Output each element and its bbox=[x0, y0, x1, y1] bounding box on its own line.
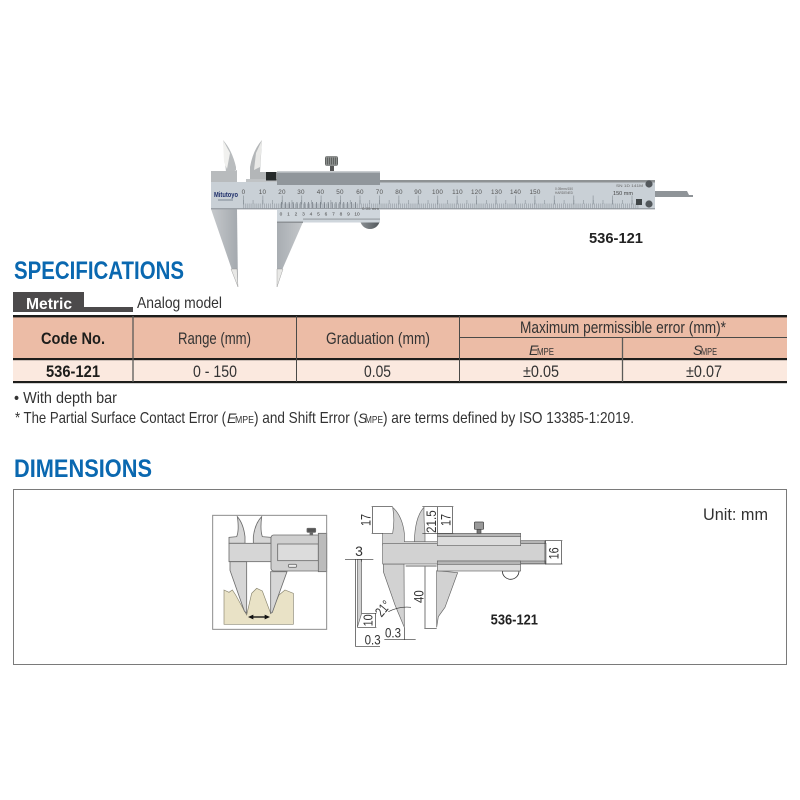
main scale numbers: 150 bbox=[529, 189, 541, 196]
header: code no: Code No. bbox=[41, 329, 105, 348]
note: error definitions bbox=[15, 410, 634, 427]
header: empe bbox=[529, 342, 554, 358]
header: maximum permissible error: Maximum permissible error (mm)* bbox=[520, 319, 726, 337]
slider: 4 bbox=[310, 212, 313, 218]
upper fixed jaw bbox=[211, 140, 237, 182]
thumb screw bbox=[325, 156, 338, 171]
thumb roller bbox=[360, 219, 380, 229]
caliper outline bbox=[357, 507, 546, 627]
dimension values bbox=[355, 510, 561, 647]
dimension values: 3 bbox=[355, 543, 363, 559]
dimension values: 17 bbox=[357, 514, 373, 526]
main scale numbers: 30 bbox=[297, 189, 305, 196]
main scale numbers: 10 bbox=[259, 189, 266, 196]
note: error definitions: E bbox=[227, 410, 237, 426]
heading: specifications: SPECIFICATIONS bbox=[14, 257, 184, 285]
main scale numbers: 0 bbox=[242, 189, 246, 196]
slider: 2 bbox=[295, 212, 298, 218]
tab: metric: Metric bbox=[26, 296, 72, 313]
slider: 0.05 mm bbox=[362, 207, 379, 211]
main scale numbers: 20 bbox=[278, 189, 286, 196]
dimension values: 21.5 bbox=[423, 510, 439, 533]
note: error definitions: ) are terms defined by ISO 13385-1:2019. bbox=[383, 410, 634, 427]
text: unit: Unit: mm bbox=[703, 505, 768, 524]
caliper jaws bbox=[229, 517, 327, 613]
beam end markings: HARDENED bbox=[555, 191, 573, 195]
main scale ticks bbox=[243, 200, 639, 206]
dimension values: 10 bbox=[361, 614, 375, 626]
slider: 5 bbox=[317, 212, 320, 218]
figure frame bbox=[213, 515, 327, 629]
header: smpe: S bbox=[693, 342, 703, 358]
measuring arrow bbox=[248, 615, 270, 619]
note: error definitions: * The Partial Surface Contact Error ( bbox=[15, 410, 227, 427]
specifications table bbox=[13, 315, 787, 383]
slider: 7 bbox=[332, 212, 335, 218]
header: smpe: MPE bbox=[701, 347, 717, 358]
cell: range: 0 - 150 bbox=[193, 363, 237, 381]
beam end markings: SN 1D 141M bbox=[616, 183, 643, 188]
header: empe: MPE bbox=[537, 347, 554, 358]
main scale numbers: 80 bbox=[395, 189, 403, 196]
main scale numbers: 70 bbox=[376, 189, 383, 196]
panel: dimensions frame bbox=[14, 490, 786, 664]
header: smpe bbox=[693, 342, 717, 358]
note: error definitions: MPE bbox=[235, 415, 254, 426]
header: graduation: Graduation (mm) bbox=[326, 330, 430, 348]
note: error definitions: ) and Shift Error ( bbox=[254, 410, 359, 427]
note: error definitions: MPE bbox=[365, 415, 383, 426]
slider: 3 bbox=[302, 212, 305, 218]
drawing model number: 536-121 bbox=[491, 611, 538, 628]
figure: measuring groove with caliper bbox=[213, 515, 327, 629]
dimension lines bbox=[345, 507, 562, 647]
slider: 0 bbox=[280, 212, 283, 218]
depth bar bbox=[655, 191, 693, 197]
main scale numbers: 100 bbox=[432, 189, 443, 196]
note: depth bar: • With depth bar bbox=[14, 390, 118, 407]
main scale numbers: 40 bbox=[317, 189, 324, 196]
main scale numbers: 60 bbox=[356, 189, 364, 196]
brand logo: Mitutoyo bbox=[214, 190, 238, 199]
cell: graduation: 0.05 bbox=[364, 363, 391, 381]
dimension values: 0.3 bbox=[385, 625, 401, 641]
beam end markings: 150 mm bbox=[613, 191, 633, 197]
slider: 6 bbox=[325, 212, 328, 218]
main scale numbers: 110 bbox=[452, 189, 463, 196]
product photo: vernier caliper bbox=[211, 140, 693, 287]
main scale numbers bbox=[242, 189, 541, 196]
main scale numbers: 140 bbox=[510, 189, 521, 196]
main scale numbers: 130 bbox=[491, 189, 502, 196]
cell: empe value: ±0.05 bbox=[523, 363, 559, 381]
dimension values: 21° bbox=[372, 597, 394, 620]
upper moving jaw bbox=[246, 140, 278, 182]
slider: 8 bbox=[340, 212, 343, 218]
main beam bbox=[211, 182, 655, 209]
slider: 9 bbox=[347, 212, 350, 218]
slider bbox=[266, 171, 380, 223]
header: range: Range (mm) bbox=[178, 330, 251, 348]
dimension values: 17 bbox=[437, 514, 453, 526]
slider: 10 bbox=[354, 212, 360, 218]
slider: 1 bbox=[287, 212, 290, 218]
model number label: 536-121 bbox=[589, 230, 643, 247]
heading: dimensions: DIMENSIONS bbox=[14, 455, 152, 483]
brand logo bbox=[214, 190, 238, 200]
tab: metric bbox=[13, 292, 133, 313]
dimension values: 16 bbox=[545, 547, 561, 559]
cell: smpe value: ±0.07 bbox=[686, 363, 722, 381]
dimension values: 40 bbox=[411, 590, 427, 603]
text: analog model: Analog model bbox=[137, 295, 222, 312]
note: error definitions: S bbox=[358, 410, 368, 426]
technical drawing: caliper dimensions bbox=[345, 507, 562, 647]
main scale numbers: 50 bbox=[336, 189, 344, 196]
cell: code: 536-121 bbox=[46, 362, 100, 381]
lower moving jaw bbox=[277, 222, 303, 287]
beam end markings bbox=[555, 180, 653, 208]
beam end markings: 0.05mm/150 bbox=[555, 187, 573, 191]
header: empe: E bbox=[529, 342, 539, 358]
main scale numbers: 120 bbox=[471, 189, 482, 196]
dimension values: 0.3 bbox=[365, 631, 381, 647]
lower fixed jaw bbox=[211, 209, 238, 287]
main scale numbers: 90 bbox=[414, 189, 422, 196]
workpiece bbox=[224, 588, 293, 624]
